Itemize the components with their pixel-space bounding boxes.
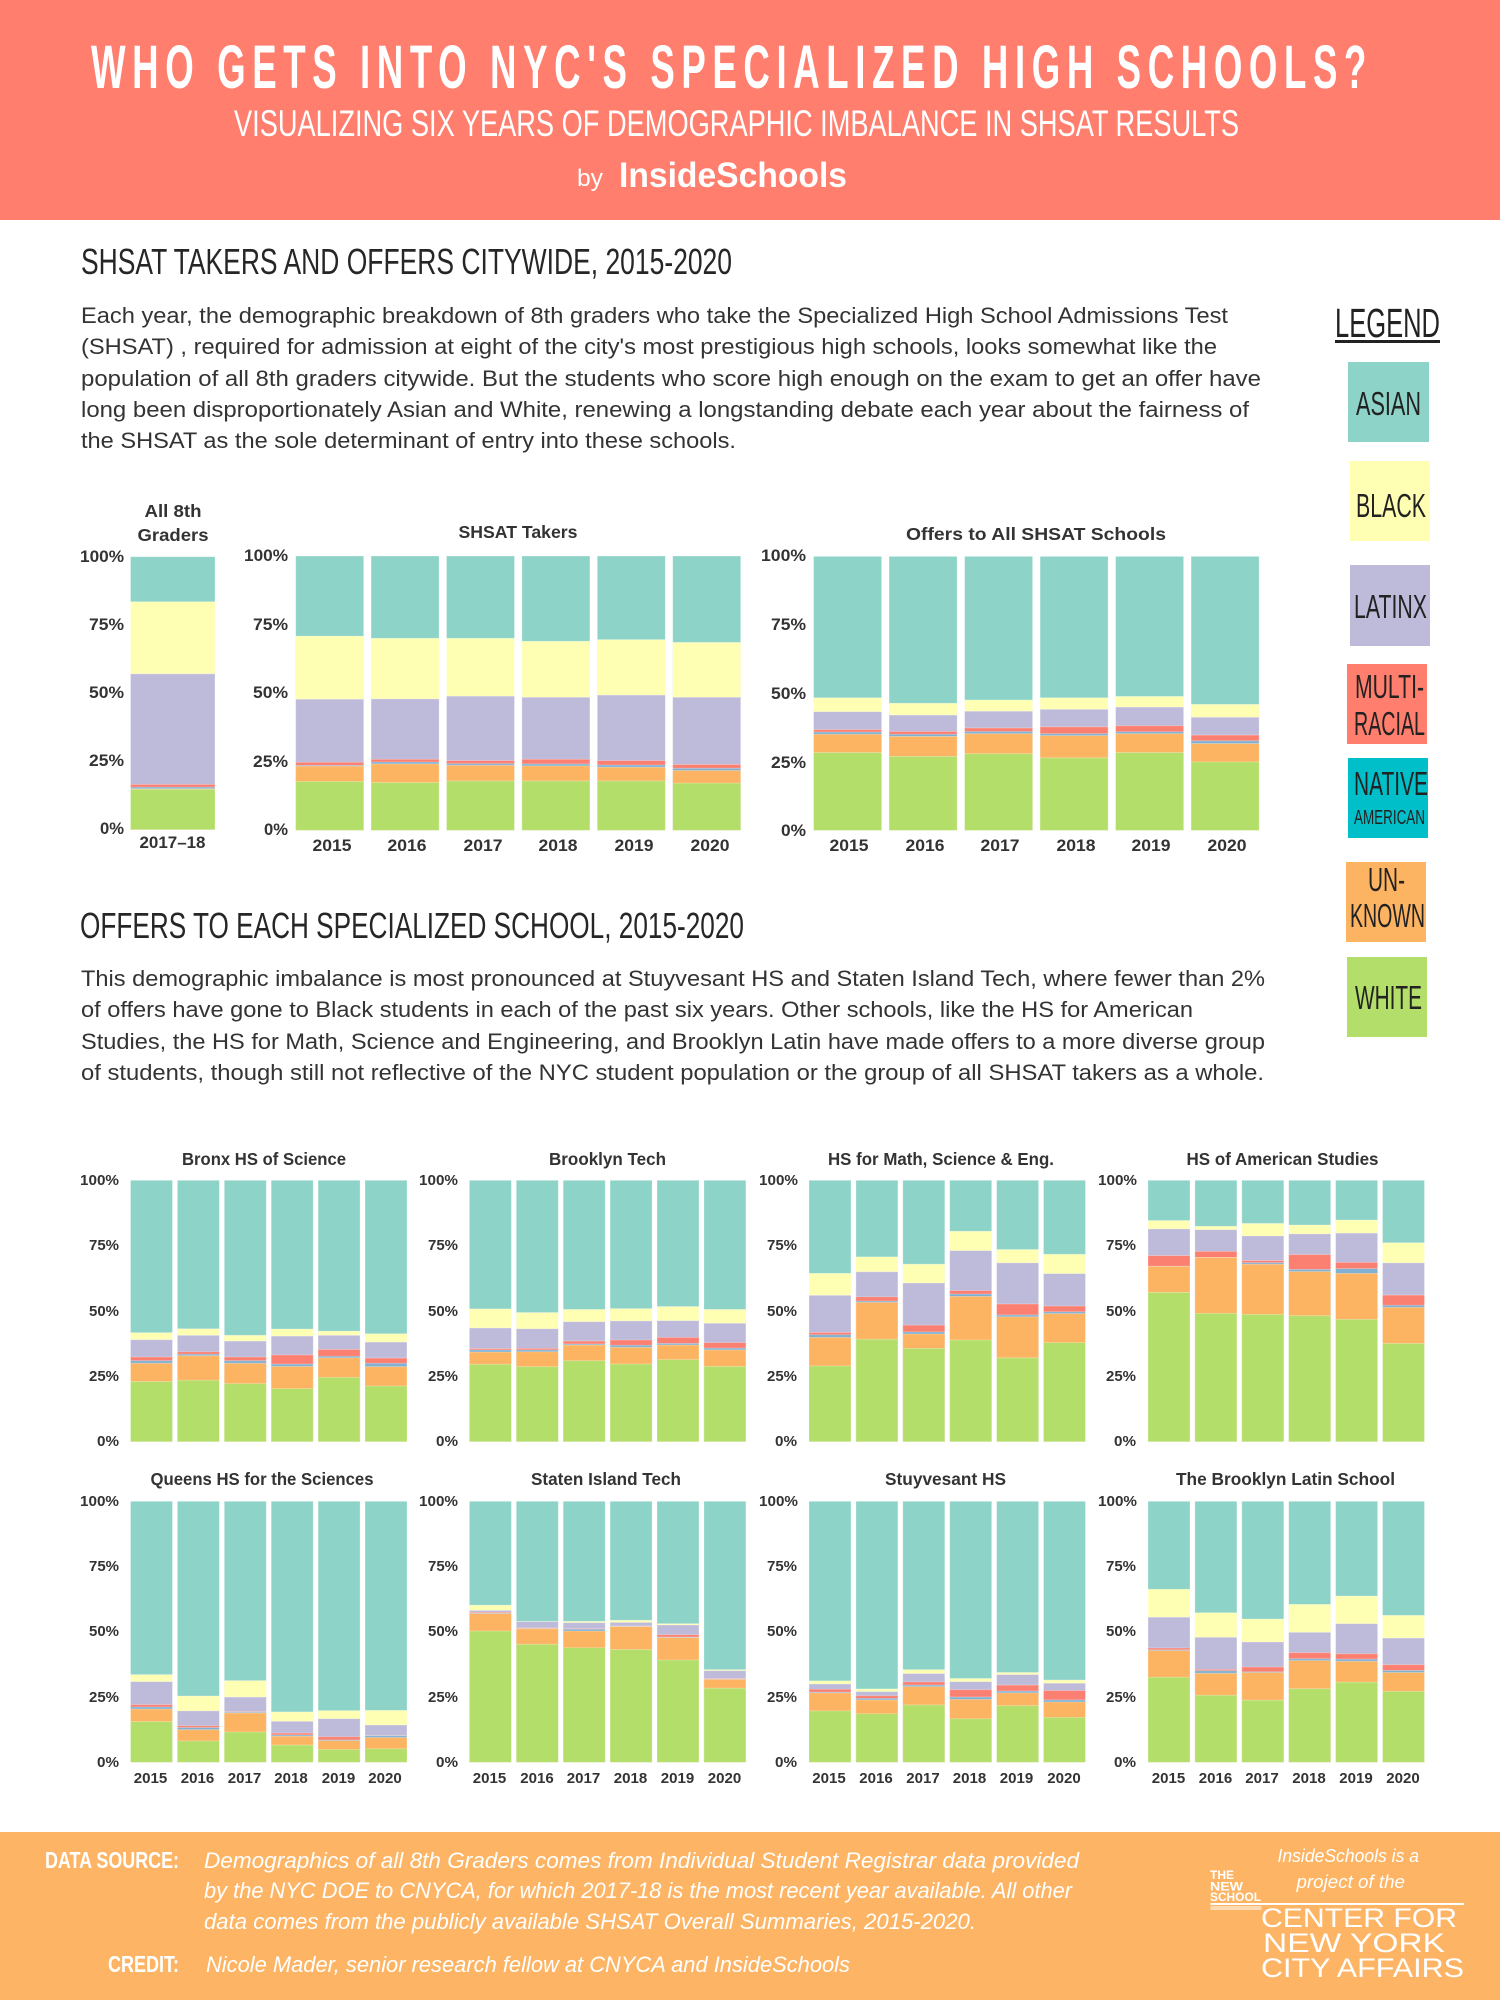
project note: [1278, 1846, 1419, 1892]
y axis: 25%: [428, 1689, 458, 1706]
y axis: [1098, 1172, 1137, 1450]
legend: native american: AMERICAN: [1354, 807, 1425, 829]
second paragraph: This demographic imbalance is most pronounced at Stuyvesant HS and Staten Island Tech, where fewer than 2%: [81, 966, 1265, 991]
chart title: Staten Island Tech: [531, 1469, 681, 1489]
y axis: 50%: [89, 1303, 119, 1320]
y axis: 0%: [100, 820, 124, 838]
y axis: [759, 1172, 798, 1450]
x labels: 2019: [1132, 837, 1170, 855]
project note: project of the: [1295, 1872, 1405, 1892]
chart title: All 8th: [144, 501, 202, 521]
y axis: 0%: [775, 1754, 797, 1771]
legend: [1335, 300, 1440, 1037]
stacked bar: [130, 557, 215, 830]
y axis: [80, 1172, 119, 1450]
y axis: 0%: [436, 1433, 458, 1450]
x labels: [812, 1771, 1081, 1787]
logo: center for new york city affairs: NEW YORK: [1263, 1928, 1445, 1958]
x labels: 2016: [1199, 1771, 1232, 1787]
logo: center for new york city affairs: CENTER FOR: [1261, 1903, 1457, 1933]
project note: InsideSchools is a: [1278, 1846, 1419, 1866]
stacked bars: [130, 1180, 407, 1442]
stacked bars: [809, 1501, 1086, 1762]
y axis: 0%: [1114, 1754, 1136, 1771]
y axis: 0%: [97, 1433, 119, 1450]
x labels: 2018: [274, 1771, 308, 1787]
legend: unknown: [1346, 861, 1426, 942]
x labels: [134, 1771, 402, 1787]
x labels: 2019: [661, 1771, 694, 1787]
intro paragraph: [81, 303, 1261, 453]
y axis: 100%: [759, 1172, 798, 1189]
y axis: 25%: [89, 1368, 119, 1385]
logo: center for new york city affairs: SCHOOL: [1210, 1892, 1261, 1904]
y axis: 50%: [767, 1623, 797, 1640]
intro paragraph: long been disproportionately Asian and White, renewing a longstanding debate each year about the fairness of: [81, 397, 1250, 422]
chart title: [138, 501, 209, 545]
logo: center for new york city affairs: NEW: [1210, 1882, 1243, 1894]
chart: brooklyn tech: [419, 1149, 746, 1450]
intro paragraph: (SHSAT) , required for admission at eight of the city's most prestigious high schools, looks somewhat like the: [81, 334, 1217, 359]
x labels: [1152, 1771, 1420, 1787]
y axis: [1098, 1493, 1137, 1771]
intro paragraph: population of all 8th graders citywide. But the students who score high enough on the exam to get an offer have: [81, 366, 1261, 391]
x labels: 2020: [1208, 837, 1246, 855]
x labels: 2016: [520, 1771, 554, 1787]
x labels: 2016: [388, 837, 426, 855]
chart: offers to all shsat schools: [761, 524, 1259, 855]
chart: bronx hs of science: [80, 1149, 407, 1450]
y axis: 100%: [1098, 1172, 1137, 1189]
logo: center for new york city affairs: THE: [1210, 1870, 1234, 1882]
x labels: 2015: [1152, 1771, 1185, 1787]
x labels: 2015: [830, 837, 868, 855]
y axis: 100%: [759, 1493, 798, 1510]
x labels: [830, 837, 1246, 855]
y axis: 75%: [89, 1237, 119, 1254]
intro paragraph: the SHSAT as the sole determinant of entry into these schools.: [81, 428, 736, 453]
y axis: 50%: [89, 684, 124, 702]
byline: by: [577, 165, 603, 192]
stacked bars: [814, 556, 1259, 830]
y axis: 100%: [244, 547, 288, 565]
y axis: 50%: [1106, 1623, 1136, 1640]
y axis: 50%: [253, 684, 288, 702]
chart: all 8th graders: [80, 501, 215, 852]
y axis: 50%: [428, 1623, 458, 1640]
x labels: 2016: [859, 1771, 893, 1787]
x labels: [312, 837, 730, 855]
stacked bars: [469, 1180, 746, 1442]
x label: 2017–18: [140, 834, 206, 852]
chart title: Bronx HS of Science: [182, 1149, 346, 1169]
second paragraph: Studies, the HS for Math, Science and Engineering, and Brooklyn Latin have made offers to a more diverse group: [81, 1029, 1265, 1054]
x labels: 2020: [1386, 1771, 1420, 1787]
y axis: 25%: [767, 1689, 797, 1706]
x labels: 2017: [1245, 1771, 1279, 1787]
legend: asian: ASIAN: [1356, 385, 1421, 422]
chart: staten island tech: [419, 1469, 746, 1787]
data source text: data comes from the publicly available SHSAT Overall Summaries, 2015-2020.: [204, 1909, 976, 1934]
legend: black: [1350, 461, 1430, 541]
legend: native american: [1348, 758, 1428, 838]
y axis: [80, 548, 124, 838]
stacked bars: [1148, 1180, 1424, 1442]
y axis: 75%: [428, 1558, 458, 1575]
legend: multi-racial: MULTI-: [1355, 668, 1424, 705]
heading: citywide: SHSAT TAKERS AND OFFERS CITYWIDE, 2015-2020: [81, 241, 732, 282]
chart: stuyvesant hs: [759, 1469, 1086, 1787]
chart title: HS of American Studies: [1186, 1149, 1379, 1169]
header banner: [0, 0, 1500, 220]
legend: multi-racial: RACIAL: [1354, 705, 1425, 742]
y axis: 100%: [80, 1172, 119, 1189]
x labels: 2020: [708, 1771, 741, 1787]
x labels: 2016: [181, 1771, 214, 1787]
chart title: Brooklyn Tech: [549, 1149, 666, 1169]
x labels: 2019: [1000, 1771, 1033, 1787]
y axis: 100%: [1098, 1493, 1137, 1510]
legend: unknown: KNOWN: [1350, 897, 1425, 934]
y axis: [244, 547, 288, 839]
x labels: 2017: [980, 837, 1020, 855]
y axis: 75%: [89, 1558, 119, 1575]
y axis: [80, 1493, 119, 1771]
second paragraph: of offers have gone to Black students in each of the past six years. Other schools, like the HS for American: [81, 997, 1193, 1022]
chart title: SHSAT Takers: [458, 522, 578, 542]
x labels: 2017: [464, 837, 502, 855]
chart: hs for math science and engineering: [759, 1149, 1086, 1450]
y axis: [761, 547, 806, 840]
stacked bars: [296, 556, 741, 830]
x labels: 2017: [567, 1771, 600, 1787]
y axis: 75%: [428, 1237, 458, 1254]
y axis: 75%: [771, 616, 806, 634]
y axis: 0%: [97, 1754, 119, 1771]
x labels: 2018: [538, 837, 578, 855]
x labels: [473, 1771, 741, 1787]
chart title: Graders: [138, 525, 209, 545]
y axis: 100%: [80, 1493, 119, 1510]
y axis: 50%: [1106, 1303, 1136, 1320]
y axis: 0%: [1114, 1433, 1136, 1450]
legend title: LEGEND: [1335, 300, 1440, 346]
x labels: 2016: [906, 837, 944, 855]
y axis: 75%: [89, 616, 124, 634]
chart title: Offers to All SHSAT Schools: [906, 524, 1166, 544]
stacked bars: [809, 1180, 1086, 1442]
legend: white: WHITE: [1355, 979, 1422, 1016]
x labels: 2018: [1292, 1771, 1326, 1787]
stacked bars: [130, 1501, 407, 1762]
y axis: 75%: [767, 1237, 797, 1254]
x labels: 2018: [614, 1771, 647, 1787]
footer: [0, 1832, 1500, 2000]
y axis: 0%: [264, 821, 288, 839]
x labels: 2015: [134, 1771, 167, 1787]
y axis: 50%: [428, 1303, 458, 1320]
y axis: 25%: [89, 1689, 119, 1706]
y axis: [419, 1172, 458, 1450]
chart: shsat takers: [244, 522, 741, 855]
y axis: [419, 1493, 458, 1771]
legend: latinx: LATINX: [1354, 588, 1427, 625]
legend: multi-racial: [1347, 664, 1427, 744]
credit text: Nicole Mader, senior research fellow at CNYCA and InsideSchools: [206, 1952, 850, 1977]
x labels: 2019: [614, 837, 654, 855]
byline: InsideSchools: [619, 156, 847, 195]
y axis: 75%: [1106, 1558, 1136, 1575]
y axis: 0%: [781, 822, 806, 840]
y axis: 0%: [775, 1433, 797, 1450]
y axis: 25%: [89, 752, 124, 770]
y axis: 50%: [89, 1623, 119, 1640]
x labels: 2020: [368, 1771, 402, 1787]
y axis: 75%: [1106, 1237, 1136, 1254]
chart: queens hs for the sciences: [80, 1469, 407, 1787]
y axis: 25%: [428, 1368, 458, 1385]
legend: native american: NATIVE: [1354, 765, 1428, 802]
x labels: 2017: [906, 1771, 940, 1787]
legend: unknown: UN-: [1368, 861, 1405, 898]
y axis: 25%: [771, 754, 806, 772]
data source label: DATA SOURCE:: [45, 1847, 179, 1873]
logo: center for new york city affairs: CITY AFFAIRS: [1261, 1953, 1464, 1983]
y axis: [759, 1493, 798, 1771]
x labels: 2015: [812, 1771, 846, 1787]
chart title: HS for Math, Science & Eng.: [828, 1149, 1054, 1169]
x labels: 2019: [1339, 1771, 1373, 1787]
x labels: 2020: [690, 837, 730, 855]
x labels: 2018: [1056, 837, 1096, 855]
credit label: CREDIT:: [108, 1951, 179, 1977]
y axis: 100%: [419, 1172, 458, 1189]
y axis: 100%: [419, 1493, 458, 1510]
y axis: 75%: [767, 1558, 797, 1575]
x labels: 2017: [228, 1771, 261, 1787]
legend: black: BLACK: [1356, 487, 1426, 524]
intro paragraph: Each year, the demographic breakdown of 8th graders who take the Specialized High School Admissions Test: [81, 303, 1229, 328]
x labels: 2020: [1047, 1771, 1081, 1787]
legend: latinx: [1350, 565, 1430, 646]
y axis: 50%: [771, 685, 806, 703]
chart: hs of american studies: [1098, 1149, 1424, 1450]
y axis: 75%: [253, 616, 288, 634]
chart: the brooklyn latin school: [1098, 1469, 1424, 1787]
y axis: 50%: [767, 1303, 797, 1320]
x labels: 2018: [953, 1771, 986, 1787]
heading: each school: OFFERS TO EACH SPECIALIZED SCHOOL, 2015-2020: [80, 905, 744, 946]
y axis: 0%: [436, 1754, 458, 1771]
stacked bars: [469, 1501, 746, 1762]
y axis: 25%: [1106, 1368, 1136, 1385]
second paragraph: [81, 966, 1265, 1085]
legend title: [1335, 300, 1440, 346]
x labels: 2015: [312, 837, 352, 855]
chart title: Stuyvesant HS: [885, 1469, 1006, 1489]
chart title: Queens HS for the Sciences: [150, 1469, 374, 1489]
second paragraph: of students, though still not reflective of the NYC student population or the group of all SHSAT takers as a whole.: [81, 1060, 1264, 1085]
chart title: The Brooklyn Latin School: [1176, 1469, 1395, 1489]
x labels: 2015: [473, 1771, 506, 1787]
y axis: 25%: [253, 753, 288, 771]
y axis: 100%: [80, 548, 124, 566]
x labels: 2019: [322, 1771, 355, 1787]
y axis: 25%: [767, 1368, 797, 1385]
y axis: 25%: [1106, 1689, 1136, 1706]
logo: center for new york city affairs: [1210, 1870, 1464, 1983]
data source text: [204, 1848, 1080, 1934]
legend: asian: [1348, 362, 1429, 442]
legend: white: [1347, 957, 1427, 1037]
stacked bars: [1148, 1501, 1424, 1762]
data source text: Demographics of all 8th Graders comes from Individual Student Registrar data provided: [204, 1848, 1080, 1873]
y axis: 100%: [761, 547, 806, 565]
data source text: by the NYC DOE to CNYCA, for which 2017-18 is the most recent year available. All other: [204, 1878, 1074, 1903]
